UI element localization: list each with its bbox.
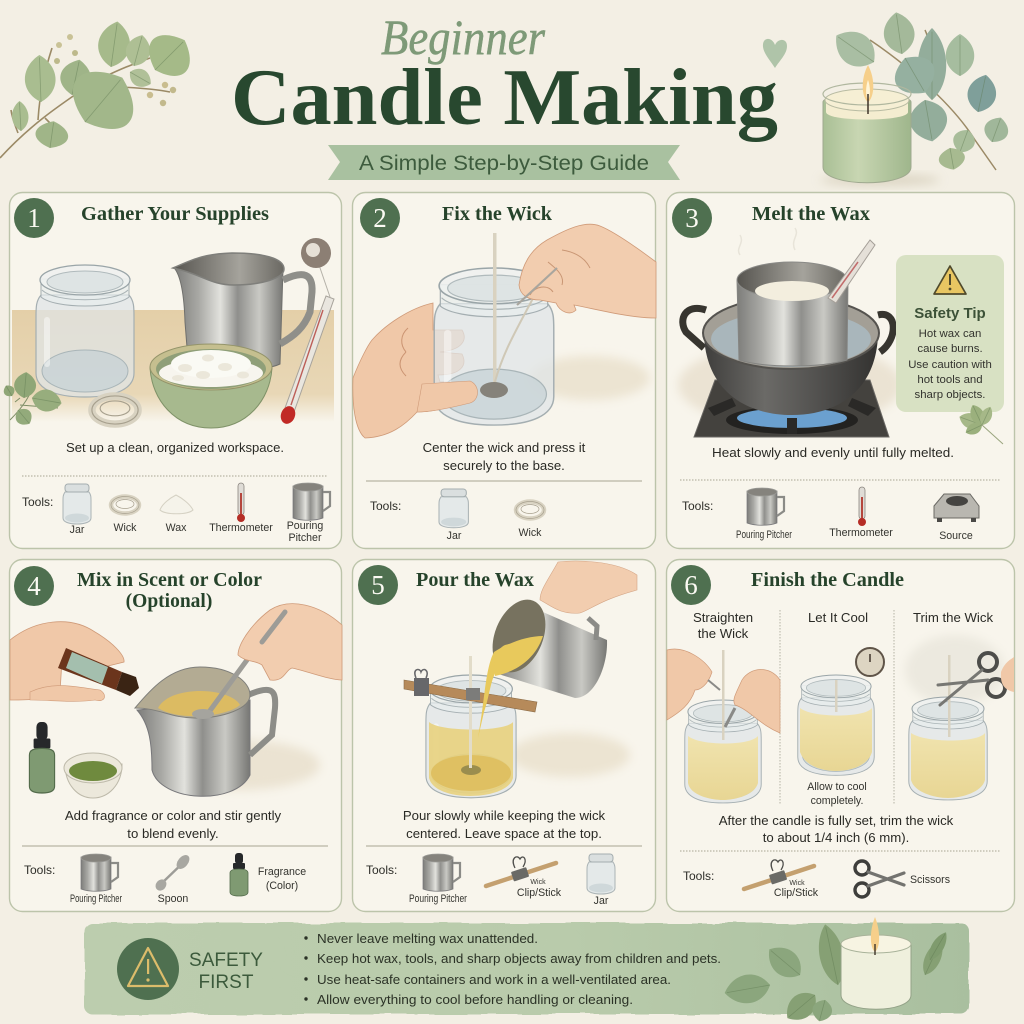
sub-step: straighten the wick: Straighten xyxy=(693,610,753,625)
caption xyxy=(65,808,282,841)
caption xyxy=(403,808,606,841)
step number 6: 6 xyxy=(684,570,698,600)
sub-step: let it cool: Let It Cool xyxy=(808,610,868,625)
callout: safety tip: Safety Tip xyxy=(914,305,986,322)
tools row: Wick xyxy=(114,522,137,534)
tools row: Fragrance xyxy=(258,866,306,878)
panel: step 5 pour the wax xyxy=(352,560,656,912)
step number 3: 3 xyxy=(685,203,699,233)
tools row: Thermometer xyxy=(829,527,893,539)
tools row: Tools: xyxy=(682,499,713,513)
tools row: Pitcher xyxy=(289,532,322,544)
callout: safety tip: hot tools and xyxy=(917,374,983,386)
decoration: right sprig and candle xyxy=(820,10,1012,186)
step number 2: 2 xyxy=(373,203,387,233)
tools row: Clip/Stick xyxy=(774,887,819,899)
panel: step 1 gather your supplies xyxy=(1,192,341,548)
heading xyxy=(77,570,262,612)
metal pitcher xyxy=(135,667,275,796)
tools row: Wick xyxy=(789,880,805,887)
panel: step 2 fix the wick xyxy=(352,192,656,548)
tools row: Tools: xyxy=(22,495,53,509)
step number 4: 4 xyxy=(27,571,41,601)
tools row: Wick xyxy=(530,879,546,886)
left hand and amber bottle xyxy=(10,622,139,701)
tools row: Jar xyxy=(594,895,609,907)
panel: step 6 finish the candle xyxy=(666,560,1014,912)
pitcher pouring xyxy=(483,592,607,698)
tools row: Tools: xyxy=(370,499,401,513)
caption: Pour slowly while keeping the wick xyxy=(403,808,606,823)
tools row: Scissors xyxy=(910,874,950,886)
caption xyxy=(423,440,586,473)
panel: step 4 mix in scent or color xyxy=(10,560,342,912)
tools row: Tools: xyxy=(683,869,714,883)
heading: (Optional) xyxy=(126,591,212,612)
sub-step: trim the wick: Trim the Wick xyxy=(913,610,993,625)
caption: securely to the base. xyxy=(443,458,565,473)
caption: Add fragrance or color and stir gently xyxy=(65,808,282,823)
tools row xyxy=(366,854,615,907)
step number 1: 1 xyxy=(27,203,41,233)
right hand xyxy=(519,224,656,318)
small leaves xyxy=(1,371,63,429)
jar with wax xyxy=(426,656,516,798)
spoon xyxy=(209,612,282,712)
tools row: Jar xyxy=(447,530,462,542)
left hand behind jar xyxy=(353,303,478,438)
tools row: Wax xyxy=(166,522,187,534)
tools row xyxy=(370,489,544,542)
safety list: Allow everything to cool before handling or cleaning. xyxy=(317,992,633,1007)
tools row xyxy=(683,860,950,899)
safety heading: SAFETY xyxy=(189,950,263,971)
wick with disc xyxy=(480,233,545,398)
tools row: Tools: xyxy=(24,863,55,877)
sub-step: let it cool: completely. xyxy=(811,795,863,807)
bowl of green powder xyxy=(64,753,122,798)
stick and clips xyxy=(404,670,537,712)
heading: Mix in Scent or Color xyxy=(77,570,262,591)
scissors xyxy=(938,653,1005,705)
icon: warning circle xyxy=(117,938,179,1000)
hand xyxy=(540,561,637,613)
tools row: Pouring Pitcher xyxy=(736,529,792,541)
safety list: Keep hot wax, tools, and sharp objects away from children and pets. xyxy=(317,951,721,966)
caption: After the candle is fully set, trim the wick xyxy=(719,813,954,828)
sub-step: let it cool xyxy=(798,610,884,807)
title: Candle Making: Candle Making xyxy=(231,54,778,142)
tools row: (Color) xyxy=(266,880,298,892)
icon: heart xyxy=(763,39,787,68)
tools row: Clip/Stick xyxy=(517,887,562,899)
tools row: Source xyxy=(939,530,973,542)
tools row xyxy=(22,483,330,544)
illustration: pouring wax into jar xyxy=(404,561,637,798)
callout: safety tip xyxy=(896,255,1004,412)
caption xyxy=(719,813,954,845)
tools row: Pouring xyxy=(287,520,323,532)
thermometer xyxy=(278,238,334,426)
caption: Heat slowly and evenly until fully melted. xyxy=(712,445,954,460)
step number 5: 5 xyxy=(371,570,385,600)
left thumb in front xyxy=(417,381,478,412)
panel: step 3 melt the wax xyxy=(666,192,1014,548)
tools row: Jar xyxy=(70,524,85,536)
step number 4 xyxy=(14,566,54,606)
ribbon subtitle: A Simple Step-by-Step Guide xyxy=(359,151,649,175)
heading: Gather Your Supplies xyxy=(81,204,269,225)
callout: safety tip: cause burns. xyxy=(917,343,983,355)
step number 1 xyxy=(14,198,54,238)
safety list: Use heat-safe containers and work in a well-ventilated area. xyxy=(317,972,671,987)
caption: centered. Leave space at the top. xyxy=(406,826,602,841)
safety heading: FIRST xyxy=(199,972,254,993)
sub-step: trim the wick xyxy=(905,610,1014,800)
heading: Pour the Wax xyxy=(416,570,534,591)
illustration: stirring pitcher with hands xyxy=(10,604,342,798)
decoration: candle with leaves xyxy=(722,917,951,1024)
subtitle: Beginner: Beginner xyxy=(381,9,545,65)
heading: Finish the Candle xyxy=(751,570,904,591)
heading: Melt the Wax xyxy=(752,204,870,225)
caption: Center the wick and press it xyxy=(423,440,586,455)
callout: safety tip: Use caution with xyxy=(908,359,992,371)
tools row xyxy=(24,853,306,905)
sub-step: straighten the wick xyxy=(667,610,780,803)
caption: to about 1/4 inch (6 mm). xyxy=(763,830,909,845)
tools row: Wick xyxy=(519,527,542,539)
banner: safety first xyxy=(84,917,969,1024)
step number 5 xyxy=(358,565,398,605)
caption: Set up a clean, organized workspace. xyxy=(66,440,284,455)
callout: safety tip: sharp objects. xyxy=(915,389,985,401)
illustration: double boiler on stove xyxy=(678,228,902,437)
decoration: left eucalyptus sprig xyxy=(0,19,201,158)
tools row: Tools: xyxy=(366,863,397,877)
tools row: Pouring Pitcher xyxy=(70,893,122,905)
step number 6 xyxy=(671,565,711,605)
bowl of wax xyxy=(150,344,272,428)
illustration: hands fixing wick in jar xyxy=(353,224,656,438)
safety list xyxy=(304,931,721,1007)
safety heading xyxy=(189,950,263,993)
icon: warning triangle xyxy=(934,266,966,294)
tools row: Thermometer xyxy=(209,522,273,534)
sub-step: straighten the wick: the Wick xyxy=(698,626,749,641)
callout: safety tip: Hot wax can xyxy=(919,328,981,340)
step number 2 xyxy=(360,198,400,238)
header xyxy=(0,9,1012,186)
dropper bottle xyxy=(29,722,55,793)
tools row: Pouring Pitcher xyxy=(409,893,467,905)
right hand xyxy=(238,604,342,680)
wax stream xyxy=(478,636,543,738)
heading: Fix the Wick xyxy=(442,204,552,225)
tools row xyxy=(682,487,979,542)
caption: to blend evenly. xyxy=(127,826,219,841)
step number 3 xyxy=(672,198,712,238)
illustration: supplies on table xyxy=(1,238,334,429)
sub-step: let it cool: Allow to cool xyxy=(807,781,867,793)
icon: clock xyxy=(856,648,884,676)
decoration: small sprig xyxy=(957,402,1003,444)
ribbon subtitle xyxy=(328,145,680,180)
tools row: Spoon xyxy=(158,893,188,905)
safety list: Never leave melting wax unattended. xyxy=(317,931,538,946)
